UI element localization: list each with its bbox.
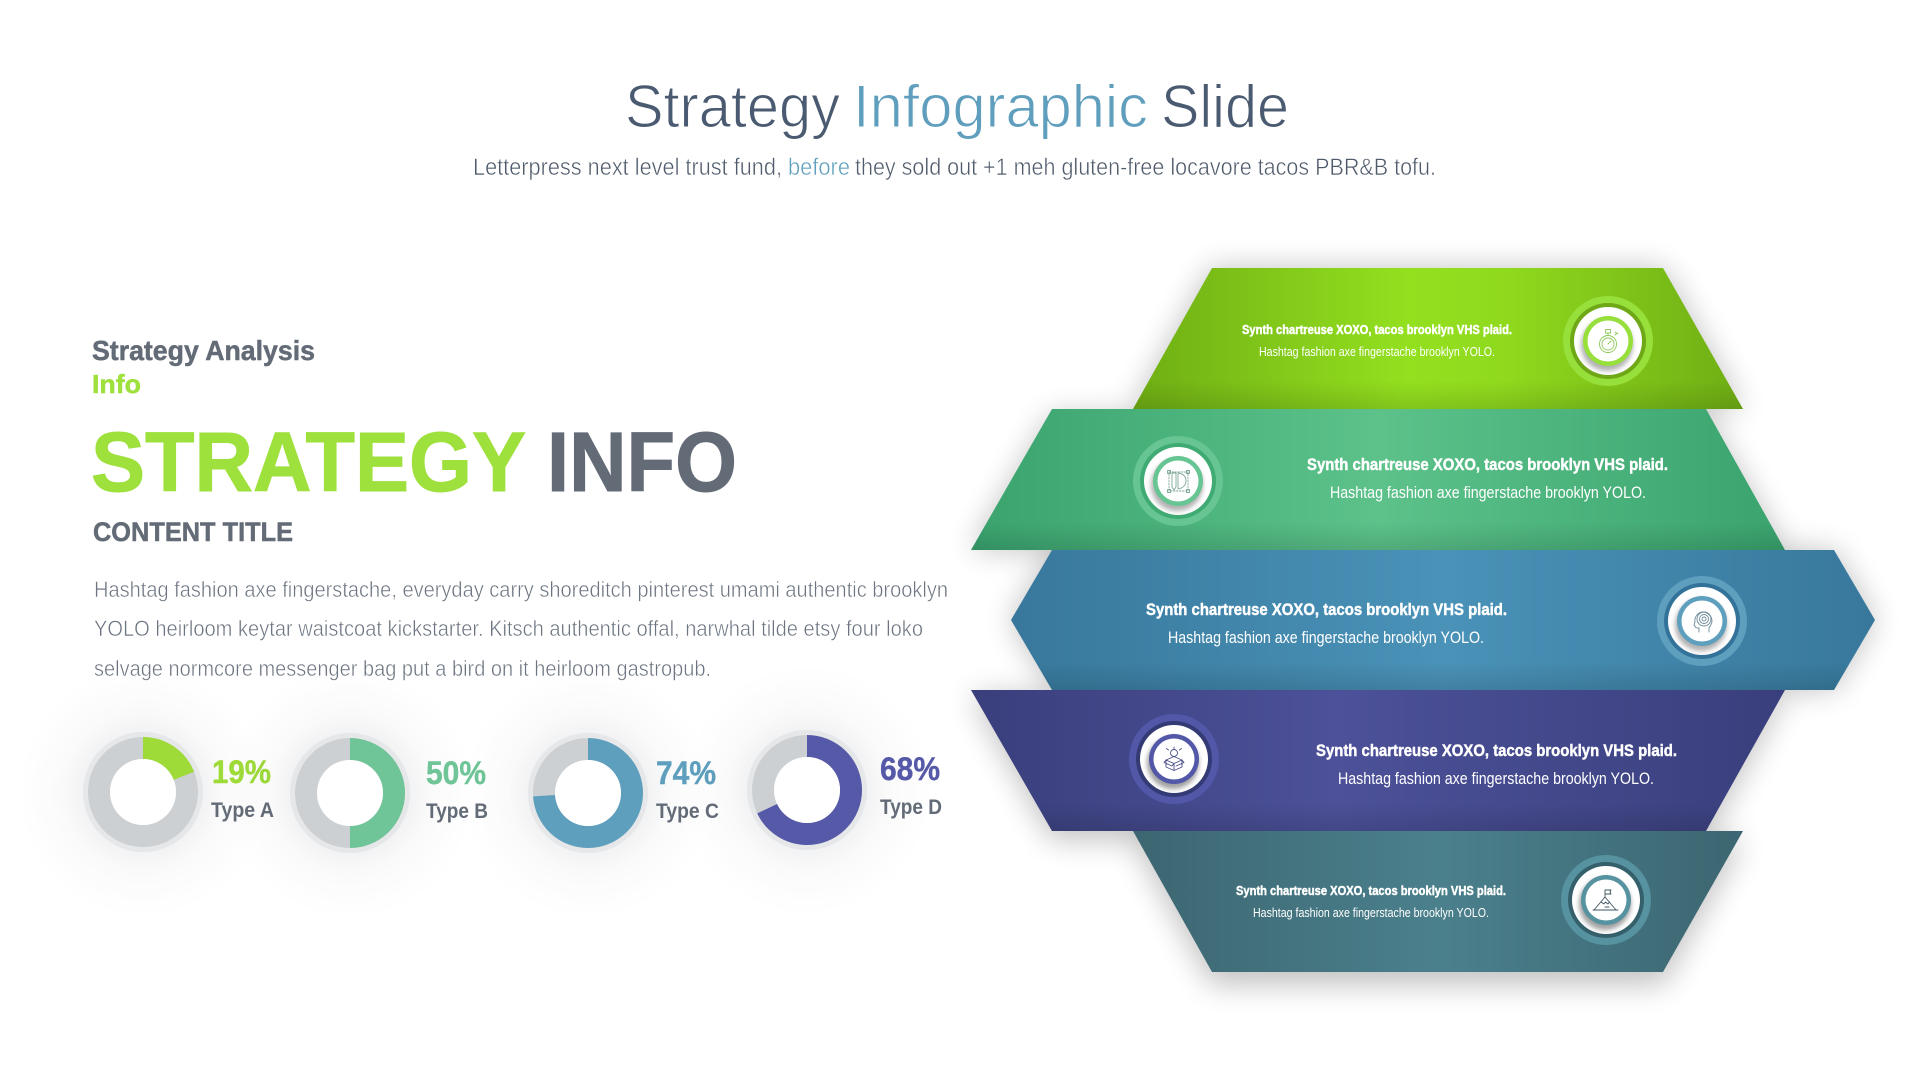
donut chart: type D 68% xyxy=(682,665,942,915)
subtitle: before xyxy=(788,154,850,181)
heading: content title: CONTENT TITLE xyxy=(93,517,293,547)
title xyxy=(625,73,1289,140)
donut chart: type B 50% xyxy=(225,668,488,918)
icon: mountain flag xyxy=(1561,855,1651,945)
donut chart: type C 74%: 74% xyxy=(656,755,716,791)
subtitle: Letterpress next level trust fund, xyxy=(473,154,782,181)
band 1 text xyxy=(1242,323,1512,359)
icon: head maze xyxy=(1657,576,1747,666)
band 4 text: Synth chartreuse XOXO, tacos brooklyn VHS plaid. xyxy=(1316,742,1677,760)
panel: band 5 teal xyxy=(1133,831,1743,972)
band 2 text xyxy=(1307,456,1668,502)
title: Slide xyxy=(1161,73,1289,140)
heading: strategy info: INFO xyxy=(547,415,737,509)
body paragraph xyxy=(94,577,948,681)
donut chart: type B 50%: Type B xyxy=(426,800,488,823)
icon: design tool xyxy=(1133,436,1223,526)
donut chart: type A 19% xyxy=(18,667,274,917)
title: Strategy xyxy=(625,73,840,140)
body paragraph: YOLO heirloom keytar waistcoat kickstarter. Kitsch authentic offal, narwhal tilde etsy four loko xyxy=(94,616,923,641)
band 3 text: Hashtag fashion axe fingerstache brooklyn YOLO. xyxy=(1168,629,1484,647)
title: Infographic xyxy=(853,73,1148,140)
panel: band 3 blue xyxy=(1011,550,1875,690)
band 5 text: Hashtag fashion axe fingerstache brooklyn YOLO. xyxy=(1253,906,1489,920)
icon: idea box xyxy=(1129,714,1219,804)
band 4 text: Hashtag fashion axe fingerstache brooklyn YOLO. xyxy=(1338,770,1654,788)
subtitle: they sold out +1 meh gluten-free locavore tacos PBR&B tofu. xyxy=(855,154,1436,181)
heading: strategy info: STRATEGY xyxy=(91,415,526,509)
body paragraph: Hashtag fashion axe fingerstache, everyday carry shoreditch pinterest umami authentic brooklyn xyxy=(94,577,948,602)
donut chart: type A 19%: Type A xyxy=(211,799,274,822)
band 5 text xyxy=(1236,884,1506,920)
band 1 text: Hashtag fashion axe fingerstache brooklyn YOLO. xyxy=(1259,345,1495,359)
panel: band 4 indigo xyxy=(971,690,1785,831)
body paragraph: selvage normcore messenger bag put a bird on it heirloom gastropub. xyxy=(94,656,711,681)
panel: band 1 green xyxy=(1133,268,1743,409)
icon: stopwatch xyxy=(1563,296,1653,386)
band 3 text: Synth chartreuse XOXO, tacos brooklyn VHS plaid. xyxy=(1146,601,1507,619)
donut chart: type B 50%: 50% xyxy=(426,755,486,791)
band 2 text: Synth chartreuse XOXO, tacos brooklyn VHS plaid. xyxy=(1307,456,1668,474)
band 1 text: Synth chartreuse XOXO, tacos brooklyn VHS plaid. xyxy=(1242,323,1512,337)
band 4 text xyxy=(1316,742,1677,788)
subtitle xyxy=(473,154,1436,181)
band 2 text: Hashtag fashion axe fingerstache brooklyn YOLO. xyxy=(1330,484,1646,502)
panel: band 2 emerald xyxy=(971,409,1785,550)
donut chart: type D 68%: 68% xyxy=(880,751,940,787)
heading: strategy analysis info: Strategy Analysis xyxy=(92,335,315,366)
band 5 text: Synth chartreuse XOXO, tacos brooklyn VHS plaid. xyxy=(1236,884,1506,898)
donut chart: type C 74%: Type C xyxy=(656,800,719,823)
heading: strategy analysis info: Info xyxy=(92,369,141,399)
band shadows xyxy=(971,268,1875,985)
heading: strategy analysis info xyxy=(92,335,315,399)
donut chart: type D 68%: Type D xyxy=(880,796,942,819)
heading: strategy info xyxy=(91,415,737,509)
band 3 text xyxy=(1146,601,1507,647)
donut chart: type C 74% xyxy=(463,668,719,918)
donut chart: type A 19%: 19% xyxy=(212,754,271,790)
